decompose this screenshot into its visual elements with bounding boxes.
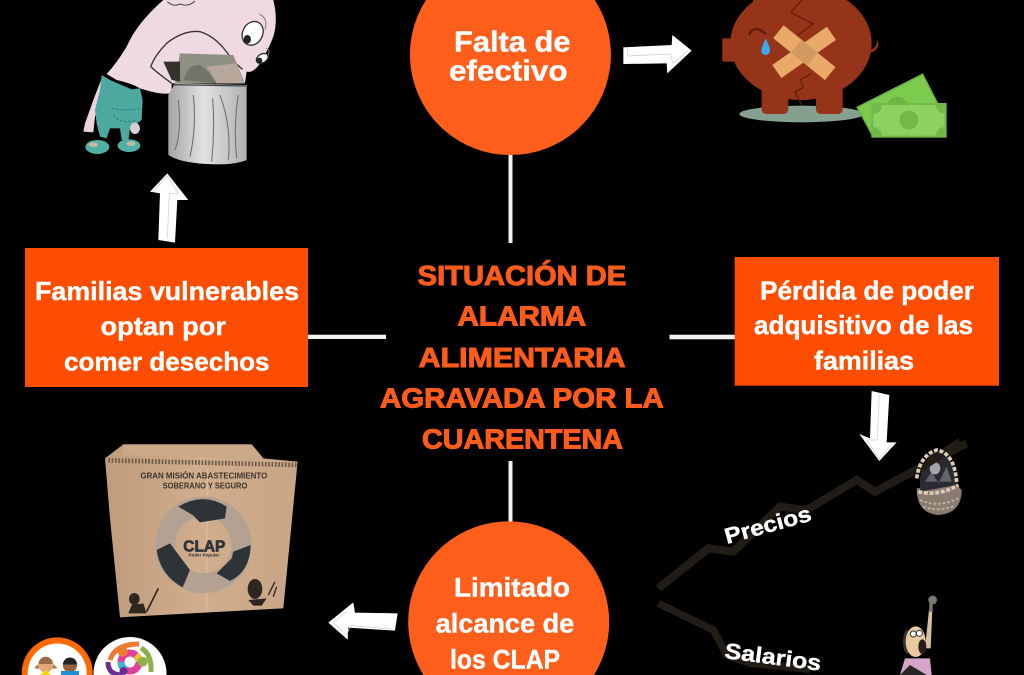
crack bbox=[791, 0, 813, 105]
body bbox=[107, 0, 276, 94]
portrait: left bbox=[128, 588, 158, 613]
hand detail bbox=[167, 1, 195, 5]
ring diagram: Poder Popular bbox=[189, 552, 220, 557]
circle: limitado alcance de los CLAP: alcance de bbox=[436, 609, 574, 639]
title: situacion de alarma alimentaria: CUARENTENA bbox=[422, 423, 623, 454]
connector lines bbox=[308, 155, 736, 522]
panel: perdida de poder adquisitivo: adquisitivo de las bbox=[754, 310, 973, 340]
illustration: woman reaching up bbox=[900, 596, 937, 675]
arrow: up bbox=[150, 173, 188, 243]
title: situacion de alarma alimentaria: SITUACIÓN DE bbox=[418, 260, 626, 291]
chart: precios y salarios bbox=[658, 443, 967, 675]
box body bbox=[105, 444, 298, 617]
illustration: person looking into trash can bbox=[83, 0, 276, 164]
circle: falta de efectivo: efectivo bbox=[449, 56, 568, 88]
trash can bbox=[168, 83, 247, 164]
eye bbox=[749, 29, 766, 35]
circle: limitado alcance de los CLAP: los CLAP bbox=[450, 645, 560, 675]
bandage bbox=[772, 25, 836, 80]
illustration: CLAP box bbox=[105, 444, 298, 617]
circle: falta de efectivo bbox=[410, 0, 611, 155]
label: salarios: Salarios bbox=[723, 638, 823, 675]
pig body bbox=[722, 0, 878, 114]
price line bbox=[658, 443, 967, 669]
shadow bbox=[739, 106, 864, 122]
eyes bbox=[238, 14, 270, 65]
box subheading: SOBERANO Y SEGURO bbox=[163, 480, 248, 490]
title: situacion de alarma alimentaria: ALARMA bbox=[458, 301, 586, 332]
tear bbox=[761, 38, 770, 55]
arrow: left bbox=[328, 602, 398, 640]
money bbox=[857, 74, 946, 137]
circle: limitado alcance de los CLAP bbox=[408, 521, 609, 675]
portrait: right bbox=[248, 579, 277, 606]
logo: children bbox=[22, 637, 93, 675]
circle: limitado alcance de los CLAP: Limitado bbox=[454, 573, 570, 603]
label: precios: Precios bbox=[722, 501, 814, 549]
circle: falta de efectivo: Falta de bbox=[454, 27, 570, 59]
overalls bbox=[85, 75, 143, 154]
panel: familias vulnerables: Familias vulnerables bbox=[35, 276, 299, 306]
panel: familias vulnerables bbox=[25, 248, 308, 387]
logo: community wheel bbox=[94, 637, 166, 675]
ring diagram: CLAP bbox=[183, 538, 225, 555]
box heading: GRAN MISIÓN ABASTECIMIENTO bbox=[140, 470, 268, 481]
panel: perdida de poder adquisitivo: Pérdida de poder bbox=[760, 275, 974, 305]
arm behind bbox=[83, 78, 104, 132]
panel: perdida de poder adquisitivo bbox=[735, 257, 999, 386]
panel: familias vulnerables: comer desechos bbox=[64, 347, 270, 377]
panel: familias vulnerables: optan por bbox=[100, 311, 226, 341]
illustration: broken piggy bank bbox=[722, 0, 946, 137]
title: situacion de alarma alimentaria: ALIMENTARIA bbox=[419, 342, 626, 373]
arrow: down bbox=[859, 391, 897, 461]
arrow: right bbox=[623, 35, 692, 73]
trash contents bbox=[163, 53, 245, 83]
title: situacion de alarma alimentaria: AGRAVADA POR LA bbox=[380, 383, 664, 414]
illustration: basket bbox=[915, 442, 962, 515]
title: situacion de alarma alimentaria bbox=[380, 260, 664, 454]
ring diagram bbox=[157, 499, 251, 587]
panel: perdida de poder adquisitivo: familias bbox=[814, 345, 914, 375]
